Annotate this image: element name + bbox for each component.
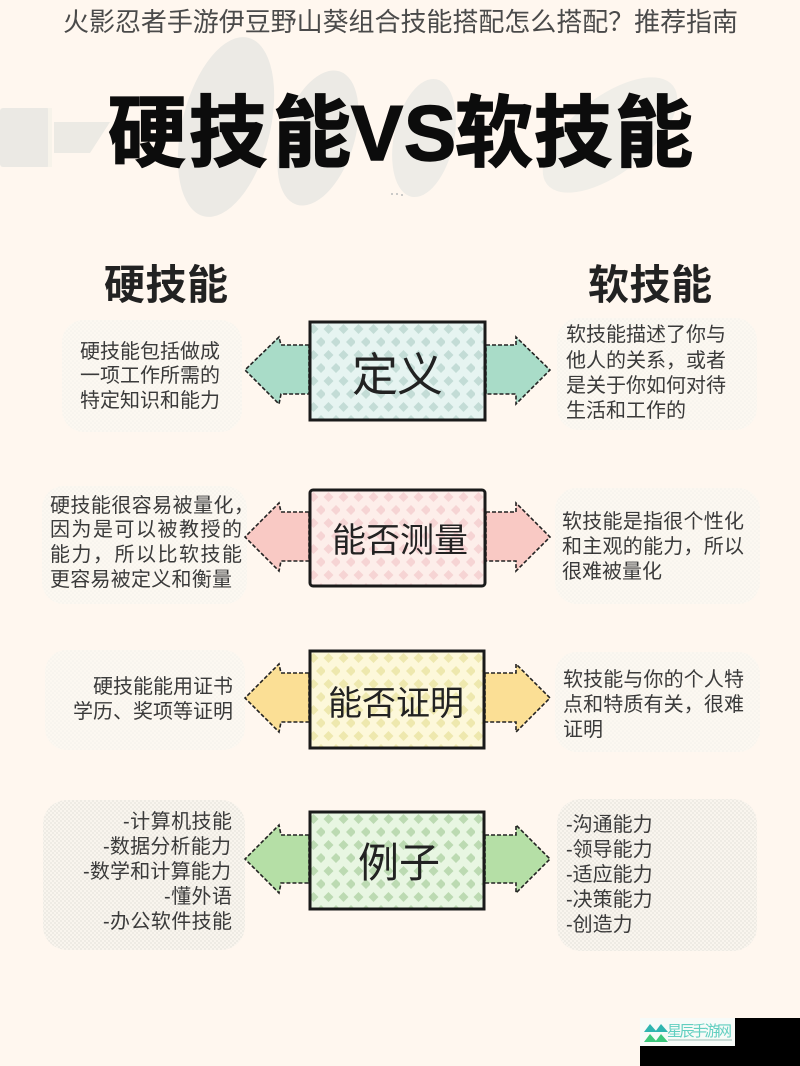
column heading: soft skills: 软技能 (588, 262, 712, 308)
panel: hard skill examples: -数据分析能力 (103, 835, 231, 858)
panel: hard skill examples (43, 800, 245, 950)
row: definition (62, 318, 757, 432)
panel: soft skill measurability (555, 488, 760, 604)
row: provable (45, 650, 760, 752)
box: definition (310, 322, 485, 420)
panel: hard skill measurability: 硬技能很容易被量化， (50, 494, 254, 517)
panel: hard skill proof (45, 650, 245, 750)
panel: soft skill definition: 是关于你如何对待 (566, 374, 726, 397)
panel: hard skill proof: 硬技能能用证书 (93, 675, 233, 698)
panel: soft skill examples: -适应能力 (566, 863, 653, 886)
box: measurable: 能否测量 (332, 522, 468, 560)
panel: hard skill proof: 学历、奖项等证明 (73, 700, 233, 723)
box: definition: 定义 (352, 349, 443, 401)
watermark logo (640, 1018, 735, 1046)
box: examples: 例子 (358, 840, 440, 886)
arrow: double arrow mint (245, 337, 550, 404)
panel: soft skill definition: 他人的关系，或者 (566, 349, 726, 372)
panel: hard skill examples: -办公软件技能 (103, 910, 232, 933)
box: provable (310, 651, 484, 748)
box: provable: 能否证明 (328, 685, 464, 723)
column heading: hard skills: 硬技能 (104, 262, 228, 308)
main heading: 硬技能VS软技能 (108, 89, 693, 177)
arrow: double arrow green (245, 825, 550, 893)
panel: hard skill definition: 硬技能包括做成 (80, 340, 220, 363)
panel: soft skill proof (555, 652, 760, 752)
row: examples (43, 799, 757, 951)
arrow: double arrow pink (245, 503, 550, 571)
panel: hard skill definition: 特定知识和能力 (80, 389, 220, 412)
panel: soft skill examples (557, 799, 757, 951)
box: examples (310, 812, 484, 909)
box: measurable (310, 490, 485, 586)
arrow: double arrow yellow (245, 664, 550, 732)
panel: hard skill definition: 一项工作所需的 (80, 364, 220, 387)
panel: soft skill measurability: 软技能是指很个性化 (562, 510, 744, 533)
black corner block (640, 1018, 800, 1066)
panel: hard skill examples: -计算机技能 (123, 810, 232, 833)
panel: hard skill measurability: 能力，所以比软技能 (50, 543, 242, 566)
panel: soft skill examples: -领导能力 (566, 838, 653, 861)
panel: soft skill examples: -决策能力 (566, 888, 653, 911)
panel: soft skill definition: 软技能描述了你与 (566, 323, 726, 346)
watermark: pencil and scribble behind heading (0, 27, 696, 227)
panel: hard skill measurability: 更容易被定义和衡量 (50, 568, 232, 591)
panel: soft skill measurability: 很难被量化 (562, 560, 662, 583)
panel: soft skill proof: 软技能与你的个人特 (563, 668, 744, 691)
panel: soft skill definition (557, 318, 757, 430)
panel: soft skill measurability: 和主观的能力，所以 (562, 535, 744, 558)
panel: soft skill examples: -创造力 (566, 913, 633, 936)
row: measurable (42, 486, 760, 604)
panel: hard skill examples: -懂外语 (164, 885, 232, 908)
panel: soft skill examples: -沟通能力 (566, 813, 653, 836)
watermark logo: 星辰手游网 (667, 1023, 732, 1040)
panel: hard skill examples: -数学和计算能力 (83, 860, 231, 883)
panel: hard skill measurability (42, 486, 254, 604)
title: 火影忍者手游伊豆野山葵组合技能搭配怎么搭配？推荐指南 (63, 2, 738, 39)
panel: hard skill measurability: 因为是可以被教授的 (50, 518, 242, 541)
panel: hard skill definition (62, 320, 242, 432)
icon: triangles (644, 1024, 668, 1032)
panel: soft skill definition: 生活和工作的 (566, 399, 686, 422)
panel: soft skill proof: 点和特质有关，很难 (563, 693, 744, 716)
panel: soft skill proof: 证明 (563, 718, 603, 741)
